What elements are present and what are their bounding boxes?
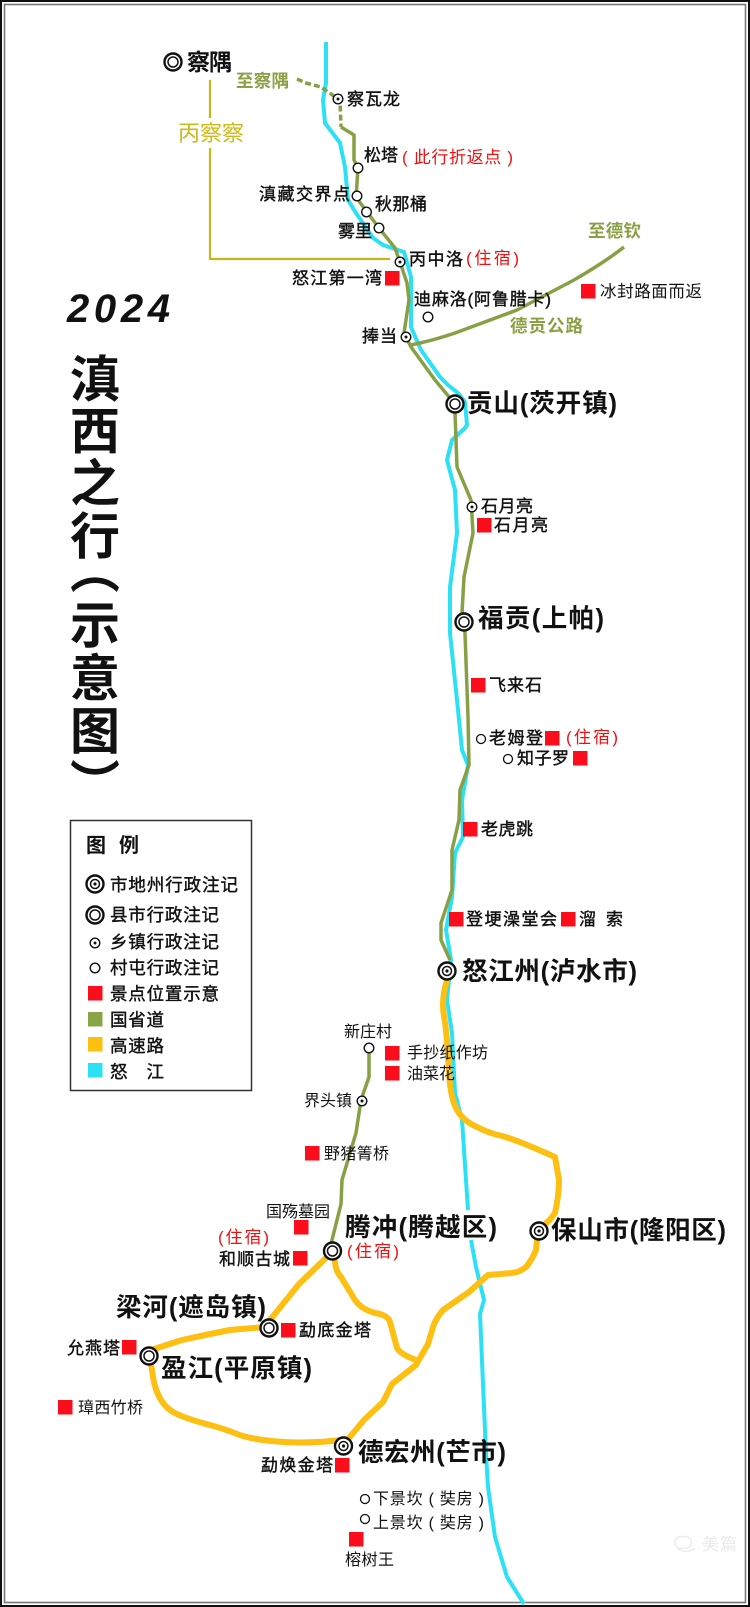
title: 意 (70, 651, 120, 707)
label: Tiger Leap: 老虎跳 (481, 820, 533, 839)
marker: Gongshan (446, 396, 464, 412)
scenic: Banyan king (349, 1532, 364, 1546)
legend: scenic swatch (88, 986, 102, 1000)
marker: Nujiang prefecture (438, 962, 456, 980)
line: Bingzhongluo to Chayu route (210, 80, 390, 259)
legend panel (70, 820, 252, 1090)
label: Zip line: 溜 索 (579, 910, 623, 929)
marker: Songta (353, 163, 363, 173)
label: Tengchong: 腾冲(腾越区) (345, 1214, 497, 1242)
expressway: Nujiang to Baoshan and Dehong (344, 980, 559, 1444)
marker: Xinzhuang village (364, 1043, 374, 1053)
label: Qiunatong: 秋那桶 (375, 195, 427, 214)
label: Banyan king: 榕树王 (345, 1551, 394, 1569)
label: lodging at Laomudeng: (住宿) (566, 728, 618, 747)
legend: expressway label: 高速路 (110, 1036, 164, 1056)
marker: Zhiziluo (504, 754, 512, 764)
marker: Qiunatong (362, 207, 371, 217)
legend: town label: 乡镇行政注记 (110, 932, 219, 952)
scenic: Flying stone (471, 678, 486, 692)
marker: Dehong (335, 1438, 352, 1454)
legend: village marker (90, 963, 100, 973)
label: papermaking: 手抄纸作坊 (407, 1044, 488, 1062)
legend heading: 图 例 (86, 834, 139, 857)
label: boar bridge: 野猪箐桥 (324, 1145, 389, 1163)
title: 之 (70, 456, 120, 512)
label: Yunnan-Tibet border: 滇藏交界点 (259, 185, 350, 204)
scenic: Mengdi golden pagoda (281, 1323, 296, 1338)
title: 西 (70, 404, 120, 460)
scenic: Nujiang first bend (385, 271, 400, 286)
legend: river label: 怒 江 (110, 1062, 164, 1082)
label: Chayu: 察隅 (187, 49, 232, 75)
marker: Fugong (456, 614, 472, 630)
title: 图 (70, 704, 120, 760)
label: turnaround point: ( 此行折返点 ) (402, 148, 513, 167)
marker: Wuli (374, 223, 384, 233)
marker: Laomudeng (476, 734, 486, 744)
label: Zhiziluo: 知子罗 (517, 749, 569, 768)
scenic: Menghuan golden pagoda (335, 1458, 350, 1472)
label: Dimaluo: 迪麻洛(阿鲁腊卡) (414, 290, 551, 309)
label: Laomudeng: 老姆登 (489, 729, 543, 748)
marker: Dimaluo (423, 312, 433, 322)
river: Nujiang lower (471, 1240, 524, 1604)
label: to Chayu: 至察隅 (236, 71, 289, 91)
label: Degong highway: 德贡公路 (510, 316, 584, 336)
road: Xinzhuang to Tengchong (331, 1048, 369, 1244)
marker: Shiyueliang town (467, 502, 477, 512)
label: Fugong: 福贡(上帕) (478, 605, 604, 633)
watermark (675, 1535, 737, 1554)
marker: Bingzhongluo (395, 257, 405, 267)
label: Xiajingkan: 下景坎 ( 奘房 ) (373, 1490, 484, 1508)
label: Nujiang prefecture: 怒江州(泸水市) (462, 958, 637, 986)
scenic: Laomudeng (545, 731, 560, 746)
label: Zhangxi bamboo bridge: 璋西竹桥 (78, 1399, 143, 1417)
title: ︵ (70, 543, 120, 599)
marker: Chawalong (333, 94, 343, 104)
scenic: frozen road (581, 284, 596, 298)
label: Pengdang: 捧当 (362, 327, 397, 346)
label: Heshun old town: 和顺古城 (219, 1250, 290, 1269)
marker: Tengchong (324, 1242, 341, 1260)
marker: border point (352, 191, 362, 201)
label: Dehong: 德宏州(芒市) (358, 1439, 506, 1467)
scenic: Tiger Leap (463, 822, 478, 836)
title: 行 (70, 509, 120, 565)
label: Wuli: 雾里 (338, 222, 372, 241)
label: Yingjiang: 盈江(平原镇) (161, 1355, 312, 1383)
title (70, 352, 120, 813)
watermark: 美篇 (702, 1535, 737, 1554)
label: Flying stone: 飞来石 (489, 676, 542, 695)
marker: Lianghe (260, 1320, 278, 1336)
label: Baoshan: 保山市(隆阳区) (551, 1217, 726, 1245)
scenic: martyrs cemetery (294, 1220, 308, 1234)
label: Gongshan: 贡山(茨开镇) (467, 390, 617, 418)
marker: Yingjiang (140, 1348, 158, 1364)
label: martyrs cemetery: 国殇墓园 (266, 1203, 330, 1221)
scenic: Zhangxi bamboo bridge (58, 1400, 72, 1414)
marker: Pengdang (401, 332, 411, 342)
label: to Deqin: 至德钦 (588, 221, 641, 241)
label: Bing-Cha-Cha route: 丙察察 (178, 121, 244, 146)
marker: Chayu (164, 54, 182, 70)
title: 示 (70, 598, 120, 654)
label: frozen road: 冰封路面而返 (600, 282, 702, 301)
legend: road swatch (88, 1012, 102, 1026)
legend: city marker (86, 876, 104, 892)
label: Shangjingkan: 上景坎 ( 奘房 ) (373, 1514, 484, 1532)
label: Shiyueliang scenic: 石月亮 (494, 516, 548, 535)
marker: Baoshan (530, 1222, 548, 1240)
marker: Shangjingkan (360, 1514, 370, 1524)
label: Xinzhuang village: 新庄村 (344, 1023, 392, 1041)
scenic: Zhiziluo (573, 751, 588, 766)
river: Nujiang upper (323, 42, 468, 1210)
title: 滇 (70, 352, 120, 408)
legend: river swatch (88, 1063, 102, 1078)
legend: town marker (90, 938, 100, 948)
scenic: boar bridge (305, 1146, 320, 1160)
scenic: papermaking (385, 1046, 400, 1060)
label: Menghuan golden pagoda: 勐焕金塔 (261, 1456, 333, 1475)
marker: Jietou town (357, 1096, 367, 1106)
expressway: Tengchong branch (335, 1262, 416, 1360)
label: Chawalong: 察瓦龙 (347, 90, 400, 109)
label: Denggeng bath: 登埂澡堂会 (466, 910, 557, 929)
scenic: Heshun old town (293, 1251, 308, 1266)
scenic: rapeseed (385, 1066, 400, 1080)
road: dashed section to Chayu (297, 79, 341, 127)
label: lodging at Tengchong: (住宿) (347, 1242, 399, 1261)
label: Nujiang first bend: 怒江第一湾 (292, 269, 382, 288)
road: Degong highway (411, 247, 624, 345)
scenic: Denggeng bath (449, 912, 464, 926)
label: lodging at Heshun: (住宿) (218, 1228, 269, 1247)
legend: county marker (86, 906, 104, 924)
title: ︶ (70, 757, 120, 813)
marker: Xiajingkan (360, 1494, 370, 1504)
label: Lianghe: 梁河(遮岛镇) (116, 1294, 266, 1322)
scenic: Zip line (561, 912, 576, 926)
legend: expressway swatch (88, 1037, 102, 1052)
legend: scenic label: 景点位置示意 (110, 984, 219, 1004)
label: Bingzhongluo: 丙中洛 (409, 250, 463, 269)
label: Jietou town: 界头镇 (304, 1092, 352, 1110)
label: Songta: 松塔 (364, 146, 398, 165)
scenic: Yunyan pagoda (122, 1340, 136, 1354)
scenic: Shiyueliang (477, 518, 492, 532)
year: 2024 (66, 287, 170, 331)
label: lodging at Bingzhongluo: (住宿) (466, 249, 519, 268)
expressway: Tengchong Lianghe Yingjiang Dehong loop (151, 1252, 342, 1442)
label: rapeseed: 油菜花 (407, 1065, 455, 1083)
label: Yunyan pagoda: 允燕塔 (67, 1339, 120, 1358)
legend: road label: 国省道 (110, 1010, 164, 1030)
legend: village label: 村屯行政注记 (110, 958, 219, 978)
road: national road north section (341, 127, 473, 960)
legend: county label: 县市行政注记 (110, 905, 219, 925)
label: Mengdi golden pagoda: 勐底金塔 (299, 1321, 371, 1340)
label: Shiyueliang town: 石月亮 (481, 497, 533, 516)
legend: city label: 市地州行政注记 (110, 875, 238, 895)
